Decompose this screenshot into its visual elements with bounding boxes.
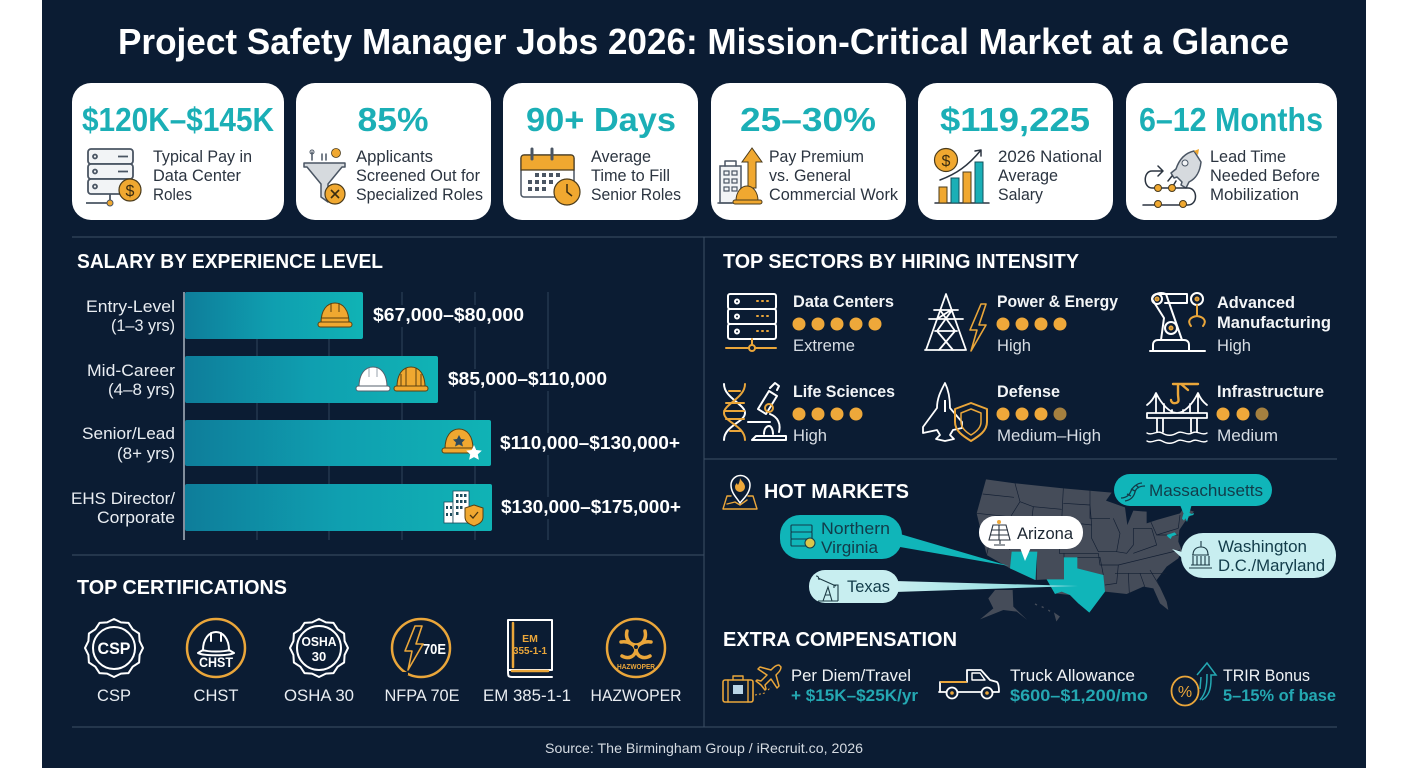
badge: HAZWOPER: HAZWOPER	[617, 662, 656, 671]
panel: hot markets	[723, 474, 1336, 620]
item: per diem: Per Diem/Travel	[791, 667, 911, 685]
sector: infrastructure	[1147, 383, 1324, 445]
card: pay premium	[711, 83, 906, 220]
sector: data centers	[726, 293, 894, 355]
callout: Northern Virginia: Northern	[821, 519, 890, 538]
callout: Arizona: Arizona	[1017, 524, 1074, 543]
sector: life sciences: High	[793, 427, 827, 445]
callout: Washington D.C./Maryland: D.C./Maryland	[1218, 556, 1325, 575]
callout: Massachusetts: Massachusetts	[1149, 481, 1263, 500]
card: time to fill: 90+ Days	[526, 101, 676, 138]
callout: Texas: Texas	[847, 577, 890, 596]
icon: bridge and crane	[1147, 384, 1207, 443]
bar: senior	[82, 420, 685, 466]
heading: salary: SALARY BY EXPERIENCE LEVEL	[77, 251, 383, 273]
icon: DNA and microscope	[724, 383, 786, 440]
icon: rising bar chart with coin	[934, 148, 989, 203]
icon: rocket and timeline	[1143, 149, 1201, 208]
card: pay premium: Commercial Work	[769, 186, 899, 204]
icon: server rack	[726, 294, 776, 351]
callout: Northern Virginia: Virginia	[821, 538, 879, 557]
panel: extra compensation	[723, 629, 1336, 706]
sector: infrastructure: Infrastructure	[1217, 383, 1324, 401]
card: applicants screened: Screened Out for	[356, 167, 480, 185]
icon: percent coin with arrow	[1172, 663, 1216, 706]
card: time to fill	[503, 83, 698, 220]
bar: director: Corporate	[97, 509, 175, 527]
card: lead time: Mobilization	[1210, 186, 1299, 204]
card: time to fill: Average	[591, 148, 651, 166]
icon: building with shield	[444, 491, 483, 526]
sector: power and energy: High	[997, 337, 1031, 355]
card: lead time: Needed Before	[1210, 167, 1320, 185]
card: data center pay: Data Center	[153, 167, 241, 185]
sector: advanced manufacturing: Manufacturing	[1217, 314, 1331, 332]
sector: advanced manufacturing	[1150, 293, 1331, 355]
source line: Source: The Birmingham Group / iRecruit.co, 2026	[545, 740, 863, 756]
card: time to fill: Time to Fill	[591, 167, 670, 185]
sector: data centers: Extreme	[793, 337, 855, 355]
item: TRIR bonus: TRIR Bonus	[1223, 667, 1310, 685]
card: national salary	[918, 83, 1113, 220]
badge: CHST: CHST	[199, 654, 233, 670]
bar: mid-career: (4–8 yrs)	[108, 381, 175, 399]
sector: power and energy	[925, 293, 1119, 355]
card: time to fill: Senior Roles	[591, 186, 681, 204]
icon: percent coin with arrow: %	[1178, 684, 1192, 701]
card: pay premium: Pay Premium	[769, 148, 864, 166]
icon: transmission tower	[925, 294, 986, 351]
card: pay premium: vs. General	[769, 167, 851, 185]
badge: OSHA 30: OSHA	[302, 634, 337, 649]
bar: mid-career: $85,000–$110,000	[448, 369, 607, 389]
icon: helmet	[318, 303, 352, 327]
badge: CSP	[85, 619, 143, 705]
bar: senior: Senior/Lead	[82, 425, 175, 443]
icon: jet and shield	[923, 383, 987, 441]
panel: top sectors	[723, 251, 1331, 445]
badge: CSP: CSP	[97, 687, 131, 705]
icon: suitcase and plane	[723, 665, 781, 702]
card: lead time	[1126, 83, 1337, 220]
icon: rising bar chart with coin: $	[942, 153, 951, 170]
bar: senior: $110,000–$130,000+	[500, 433, 680, 453]
badge: CSP: CSP	[98, 639, 130, 658]
title: Project Safety Manager Jobs 2026: Mission-Critical Market at a Glance	[118, 21, 1289, 62]
bar: entry-level: (1–3 yrs)	[111, 317, 175, 335]
card: lead time: 6–12 Months	[1139, 101, 1323, 138]
badge: EM 385-1-1 manual: EM	[522, 633, 538, 645]
card: data center pay: Roles	[153, 186, 192, 204]
card: national salary: 2026 National	[998, 148, 1102, 166]
card: applicants screened	[296, 83, 491, 220]
sector: power and energy: Power & Energy	[997, 293, 1119, 311]
sector: advanced manufacturing: High	[1217, 337, 1251, 355]
bar: entry-level: Entry-Level	[86, 298, 175, 316]
heading: certifications: TOP CERTIFICATIONS	[77, 577, 287, 599]
item: per diem: + $15K–$25K/yr	[791, 686, 918, 705]
item: truck allowance	[939, 667, 1148, 705]
card: national salary: Average	[998, 167, 1058, 185]
sector: defense: Defense	[997, 383, 1060, 401]
item: truck allowance: Truck Allowance	[1010, 667, 1135, 685]
bar: entry-level	[86, 292, 528, 339]
sector: advanced manufacturing: Advanced	[1217, 294, 1295, 312]
item: per diem	[723, 665, 918, 705]
card: applicants screened: Specialized Roles	[356, 186, 483, 204]
card: data center pay: Typical Pay in	[153, 148, 252, 166]
icon: helmet with star	[442, 429, 482, 460]
icon: two helmets	[356, 367, 428, 391]
bar: director: $130,000–$175,000+	[501, 497, 681, 517]
card: lead time: Lead Time	[1210, 148, 1286, 166]
badge: OSHA 30: 30	[312, 649, 326, 664]
badge: OSHA 30	[284, 619, 354, 705]
badge: NFPA 70E	[384, 619, 460, 705]
bar: director	[71, 484, 686, 531]
icon: server with coin: $	[126, 183, 135, 200]
sector: life sciences: Life Sciences	[793, 383, 895, 401]
sector: data centers: Data Centers	[793, 293, 894, 311]
heading: extra compensation: EXTRA COMPENSATION	[723, 629, 957, 651]
bar: director: EHS Director/	[71, 490, 175, 508]
badge: EM 385-1-1 manual: EM 385-1-1	[483, 687, 571, 705]
heading: sectors: TOP SECTORS BY HIRING INTENSITY	[723, 251, 1080, 273]
badge: CHST: CHST	[194, 687, 238, 705]
icon: calendar and clock	[521, 149, 580, 205]
icon: pickup truck	[939, 670, 999, 698]
card: data center pay: $120K–$145K	[82, 101, 274, 138]
callout: Massachusetts	[1114, 474, 1272, 522]
card: applicants screened: 85%	[358, 101, 428, 138]
badge: HAZWOPER	[590, 619, 682, 705]
item: TRIR bonus: 5–15% of base	[1223, 686, 1336, 705]
bar chart	[71, 292, 686, 531]
bar: senior: (8+ yrs)	[117, 445, 175, 463]
card: applicants screened: Applicants	[356, 148, 433, 166]
bar: entry-level: $67,000–$80,000	[373, 305, 524, 325]
icon: robot arm	[1150, 293, 1205, 351]
sector: defense: Medium–High	[997, 427, 1101, 445]
card: data center pay	[72, 83, 284, 220]
badge: HAZWOPER: HAZWOPER	[590, 687, 682, 705]
sector: defense	[923, 383, 1101, 445]
item: TRIR bonus	[1172, 663, 1336, 706]
badge: CHST	[187, 619, 245, 705]
panel: salary by experience	[71, 251, 686, 540]
card: national salary: $119,225	[940, 101, 1090, 138]
card: pay premium: 25–30%	[740, 101, 876, 138]
sector: infrastructure: Medium	[1217, 427, 1278, 445]
badge: OSHA 30: OSHA 30	[284, 687, 354, 705]
badge: NFPA 70E: NFPA 70E	[384, 687, 460, 705]
badge: NFPA 70E: 70E	[423, 642, 446, 658]
card: national salary: Salary	[998, 186, 1044, 204]
map: United States	[977, 479, 1194, 620]
callout: Washington D.C./Maryland	[1172, 533, 1336, 578]
panel: KPI cards	[72, 83, 1337, 220]
sector: life sciences	[724, 383, 895, 445]
callout: Arizona	[979, 516, 1083, 561]
icon: map pin with flame	[723, 476, 757, 509]
item: truck allowance: $600–$1,200/mo	[1010, 686, 1148, 705]
callout: Washington D.C./Maryland: Washington	[1218, 537, 1307, 556]
icon: server with coin	[86, 149, 141, 206]
callout: Texas	[809, 570, 1078, 603]
badge: EM 385-1-1 manual	[483, 620, 571, 705]
bar: mid-career: Mid-Career	[87, 362, 176, 380]
panel: certifications	[77, 577, 682, 705]
badge: EM 385-1-1 manual: 355-1-1	[513, 645, 547, 657]
heading: hot markets: HOT MARKETS	[764, 481, 909, 503]
icon: funnel	[304, 148, 345, 204]
callout: Northern Virginia	[780, 515, 1009, 566]
bar: mid-career	[87, 356, 611, 403]
icon: building, arrow and helmet	[718, 148, 762, 204]
